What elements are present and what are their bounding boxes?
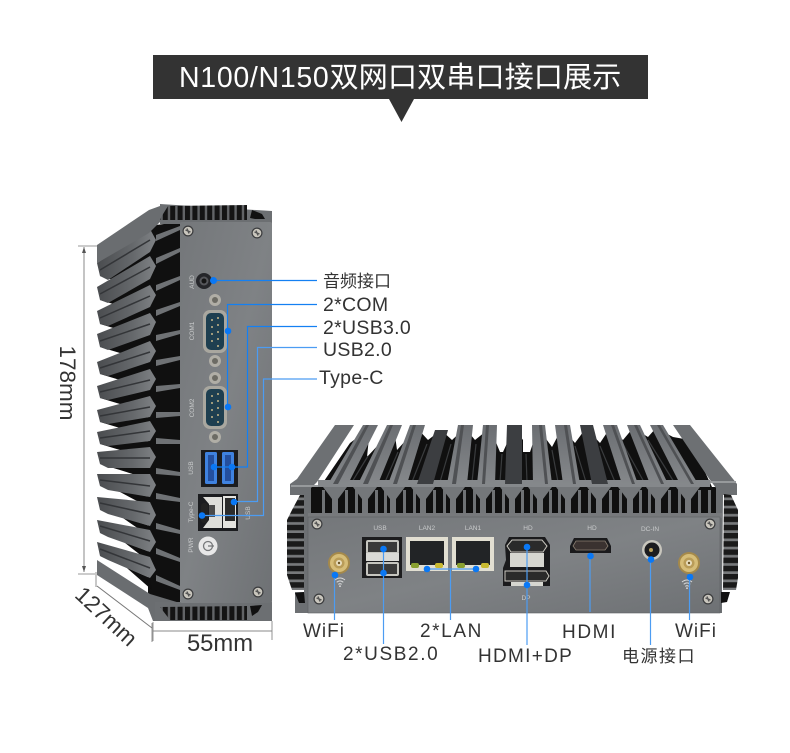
WiFi antenna right [678,552,700,589]
power button [198,536,218,556]
callout: HDMI+DP: HDMI+DP [478,646,573,667]
front panel [180,222,272,603]
rear port labels: USB [373,525,387,532]
title text: N100/N150双网口双串口接口展示 [179,61,621,94]
callout: HDMI+DP [478,544,573,667]
bottom chamfer [97,560,180,621]
LAN1 port [452,537,494,571]
callout: HDMI [562,553,617,643]
callout: HDMI: HDMI [562,622,617,643]
callout: power jack [622,556,696,667]
callout: power jack: 电源接口 [622,642,696,667]
rear port labels: HD [523,525,533,532]
top heatsink fins [311,425,716,513]
callout: 2*USB2.0: 2*USB2.0 [343,644,439,665]
callout: WiFi right [675,574,717,642]
Type-C and USB2.0 ports [198,494,238,531]
callout: WiFi right: WiFi [675,621,717,642]
callout: 2*USB2.0 [343,546,439,665]
callout: Type-C [199,367,384,519]
callout: 2*LAN [420,566,483,642]
right side vent [721,494,738,603]
top chamfer [97,206,160,263]
callout: Type-C: Type-C [319,367,384,389]
callout: 2*LAN: 2*LAN [420,621,483,642]
audio jack [196,273,212,289]
top vent [160,204,272,224]
panel port labels: COM2 [189,398,196,417]
panel port labels: AUD [189,275,196,289]
dimension: 178mm: 178mm [55,345,80,421]
panel screws [182,226,264,600]
rear screws [312,518,716,604]
callout: audio jack: 音频接口 [323,267,391,292]
COM2 port [203,372,227,443]
callout: 2*COM: 2*COM [323,294,388,316]
callout: 2*USB3.0 [211,317,411,470]
HD and DP stack [503,537,550,586]
rear port labels: LAN2 [419,525,436,532]
panel port labels: COM1 [189,321,196,340]
rear port labels [373,525,659,602]
bottom vent [155,602,272,621]
panel port labels: PWR [188,537,195,553]
HDMI port [570,538,611,553]
panel port labels [188,275,252,553]
USB stack [362,537,402,578]
panel port labels: Type-C [188,501,195,522]
rear port labels: DP [521,595,531,602]
DC power jack [642,540,662,560]
callout: USB2.0: USB2.0 [323,339,392,361]
device: side view with COM and USB ports [97,204,272,621]
left side vent [287,495,305,603]
banner pointer [389,99,414,122]
device: rear view with LAN and display ports [287,425,738,613]
dimension: 55mm [153,621,272,657]
callout: 2*COM [225,294,388,410]
rear panel [308,517,720,613]
rear port labels: DC-IN [641,526,659,533]
callout: 2*USB3.0: 2*USB3.0 [323,317,411,339]
callout: WiFi left [303,572,345,642]
title banner [153,55,648,122]
rear port labels: LAN1 [465,525,482,532]
body shell [290,425,354,613]
panel port labels: USB [188,461,195,475]
LAN2 port [406,537,448,571]
COM1 port [203,294,227,367]
USB3.0 ports [201,450,238,487]
callout: USB2.0 [231,339,392,505]
dimension: 127mm: 127mm [70,582,142,651]
heatsink fins [97,206,180,621]
callout: WiFi left: WiFi [303,621,345,642]
dimension: 55mm: 55mm [187,630,253,657]
panel port labels: USB [245,506,252,520]
rear port labels: HD [587,525,597,532]
WiFi antenna left [328,552,350,587]
callout: audio jack [210,267,391,292]
dimension: 178mm [55,246,97,574]
